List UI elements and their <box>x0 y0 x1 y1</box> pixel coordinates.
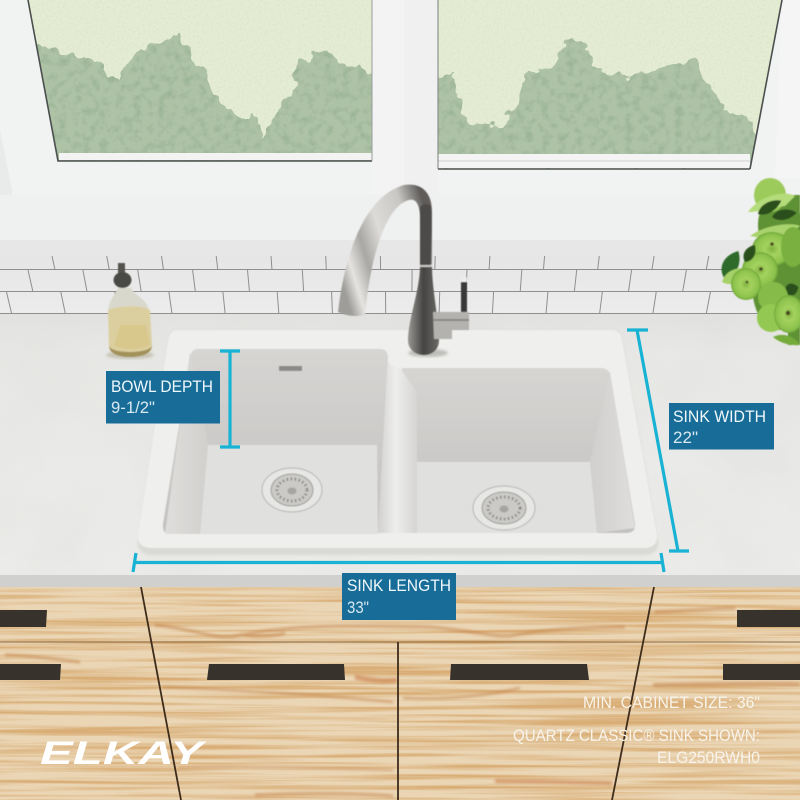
faucet handle <box>433 312 469 339</box>
faucet body <box>408 266 439 355</box>
depth measure line <box>220 351 240 447</box>
cabinets <box>0 587 800 800</box>
countertop <box>0 314 800 588</box>
product details text: MIN. CABINET SIZE: 36" <box>583 694 760 712</box>
label: bowl depth: BOWL DEPTH <box>111 377 213 396</box>
window frame <box>0 0 800 240</box>
product details text: ELG250RWH0 <box>657 749 760 767</box>
length measure line <box>133 553 664 572</box>
product details text <box>513 694 760 767</box>
label: sink length <box>342 573 456 620</box>
bottle of soap <box>106 263 154 359</box>
potted plant leaves <box>717 178 800 345</box>
window pane: left <box>27 0 372 162</box>
foliage: right pane <box>425 36 760 165</box>
right bowl <box>400 368 635 533</box>
foliage: left pane <box>30 33 385 165</box>
faucet arch <box>338 185 432 316</box>
label: sink length: 33" <box>347 598 369 617</box>
maker plate <box>279 366 302 371</box>
sink rim <box>138 330 658 555</box>
right drain <box>473 486 535 530</box>
logo: Elkay: ELKAY <box>40 735 207 771</box>
label: sink width <box>669 403 774 450</box>
window pane: right <box>425 0 790 170</box>
label: sink width: 22" <box>673 428 698 447</box>
faucet shadow <box>408 349 448 357</box>
left drain <box>262 468 322 512</box>
dimension: sink length <box>133 553 664 620</box>
label: bowl depth: 9-1/2" <box>111 398 155 417</box>
window sill <box>0 195 800 257</box>
label: sink length: SINK LENGTH <box>347 576 451 595</box>
tile backsplash <box>0 256 800 315</box>
label: sink width: SINK WIDTH <box>673 407 766 426</box>
width measure line <box>627 330 689 551</box>
faucet <box>338 185 469 357</box>
sink <box>138 330 658 555</box>
bowl divider <box>378 362 417 533</box>
label: bowl depth <box>106 371 220 424</box>
dimension: bowl depth <box>106 351 240 447</box>
left bowl <box>163 349 388 534</box>
wood grain accents <box>5 608 800 796</box>
product details text: QUARTZ CLASSIC® SINK SHOWN: <box>513 727 760 745</box>
cabinet handles <box>0 610 800 680</box>
cabinet door gaps <box>0 587 800 800</box>
dimension: sink width <box>627 330 774 551</box>
